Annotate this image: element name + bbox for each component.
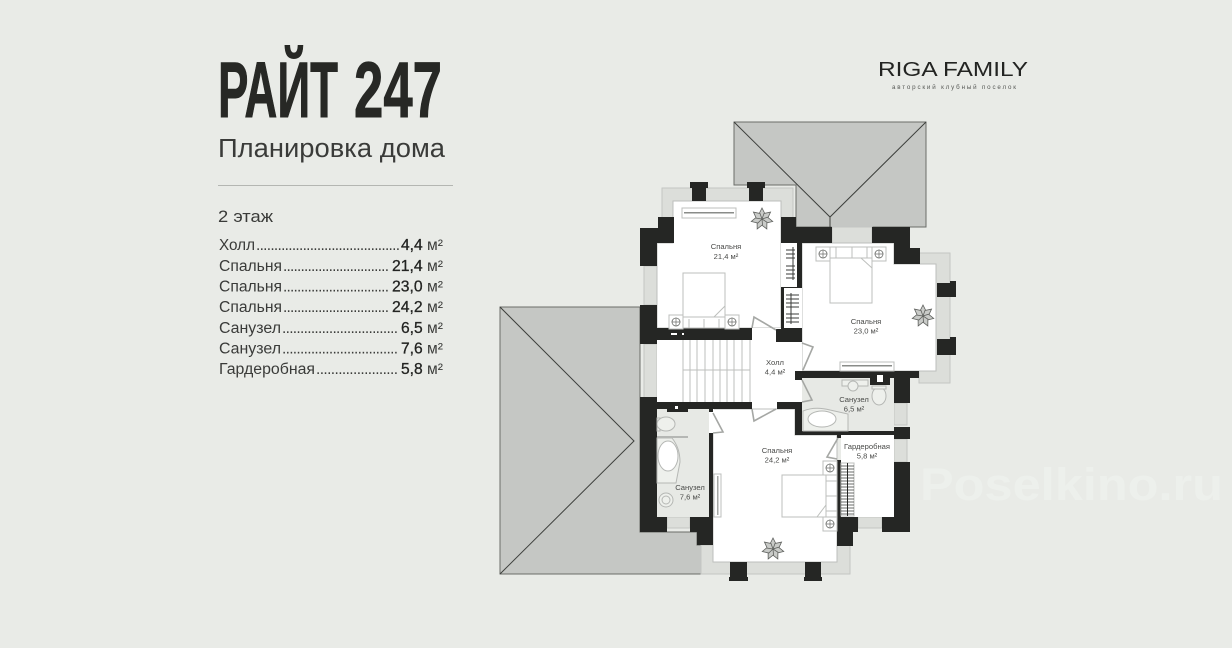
row: wardrobe: 5,8 м² bbox=[401, 361, 443, 378]
room area list bbox=[219, 237, 443, 378]
row: bathroom 6,5: Санузел bbox=[219, 320, 281, 337]
row: bathroom 7,6: ................................ bbox=[282, 340, 398, 358]
row: bathroom 7,6 bbox=[219, 340, 443, 358]
roof: top bbox=[734, 122, 926, 227]
row: bathroom 6,5: ................................ bbox=[282, 320, 398, 337]
row: bedroom 23,0: .............................. bbox=[283, 278, 389, 296]
doors bbox=[713, 317, 838, 459]
label: bathroom 7,6: 7,6 м² bbox=[680, 492, 701, 502]
label: bedroom 23,0: 23,0 м² bbox=[854, 326, 879, 336]
label: hall: Холл bbox=[766, 358, 784, 367]
label: bedroom 21,4: Спальня bbox=[711, 242, 741, 251]
row: hall: ........................................ bbox=[256, 237, 400, 254]
bathroom fixtures: 7,6 bbox=[657, 406, 688, 507]
closets bbox=[781, 243, 802, 328]
bed: top-left bedroom bbox=[669, 273, 739, 329]
bathroom fixtures: 6,5 bbox=[803, 375, 886, 431]
row: bathroom 6,5: 6,5 м² bbox=[401, 320, 443, 337]
wardrobe rack bbox=[841, 463, 854, 516]
wall units bbox=[682, 208, 894, 517]
label: bedroom 24,2: Спальня bbox=[762, 446, 792, 455]
label: bedroom 21,4: 21,4 м² bbox=[714, 252, 739, 261]
label: bedroom 23,0: Спальня bbox=[851, 317, 881, 326]
title: 247 bbox=[354, 46, 442, 134]
row: hall: 4,4 м² bbox=[401, 237, 443, 254]
row: bathroom 7,6: Санузел bbox=[219, 340, 281, 358]
row: bedroom 21,4 bbox=[219, 258, 443, 275]
row: bedroom 23,0: 23,0 м² bbox=[392, 278, 443, 296]
logo: авторский клубный поселок bbox=[892, 84, 1016, 91]
row: bedroom 24,2: Спальня bbox=[219, 299, 282, 316]
plants bbox=[751, 208, 934, 560]
subtitle: Планировка дома bbox=[218, 135, 446, 163]
row: hall: Холл bbox=[219, 237, 255, 254]
label: wardrobe: 5,8 м² bbox=[857, 452, 878, 460]
row: bedroom 21,4: Спальня bbox=[219, 258, 282, 275]
row: bedroom 23,0: Спальня bbox=[219, 278, 282, 296]
label: bathroom 6,5: 6,5 м² bbox=[844, 404, 865, 414]
row: bathroom 6,5 bbox=[219, 320, 443, 337]
floor plan bbox=[500, 122, 956, 581]
walls bbox=[640, 182, 956, 581]
row: wardrobe: Гардеробная bbox=[219, 361, 315, 378]
label: wardrobe: Гардеробная bbox=[844, 442, 890, 451]
roof: left bbox=[500, 307, 701, 574]
row: wardrobe bbox=[219, 361, 443, 378]
watermark: Poselkino.ru bbox=[920, 459, 1223, 510]
row: bedroom 21,4: 21,4 м² bbox=[392, 258, 443, 275]
terraces bbox=[644, 188, 950, 574]
bed: lower bedroom bbox=[782, 461, 837, 531]
row: bedroom 24,2: .............................. bbox=[283, 299, 389, 316]
row: bedroom 24,2 bbox=[219, 299, 443, 316]
row: bedroom 23,0 bbox=[219, 278, 443, 296]
row: bedroom 21,4: .............................. bbox=[283, 258, 389, 275]
row: bedroom 24,2: 24,2 м² bbox=[392, 299, 443, 316]
row: bathroom 7,6: 7,6 м² bbox=[401, 340, 443, 358]
label: bedroom 24,2: 24,2 м² bbox=[765, 456, 790, 464]
bed: right bedroom bbox=[816, 247, 886, 303]
floor heading: 2 этаж bbox=[218, 207, 274, 226]
row: wardrobe: ...................... bbox=[316, 361, 398, 378]
row: hall bbox=[219, 237, 443, 254]
label: bathroom 7,6: Санузел bbox=[675, 483, 705, 492]
rooms bbox=[656, 201, 936, 562]
title: РАЙТ bbox=[218, 46, 338, 134]
label: hall: 4,4 м² bbox=[765, 368, 786, 376]
staircase bbox=[683, 340, 750, 402]
divider bbox=[218, 185, 453, 186]
logo bbox=[878, 59, 1028, 91]
label: bathroom 6,5: Санузел bbox=[839, 395, 869, 404]
logo: RIGA FAMILY bbox=[878, 59, 1028, 81]
